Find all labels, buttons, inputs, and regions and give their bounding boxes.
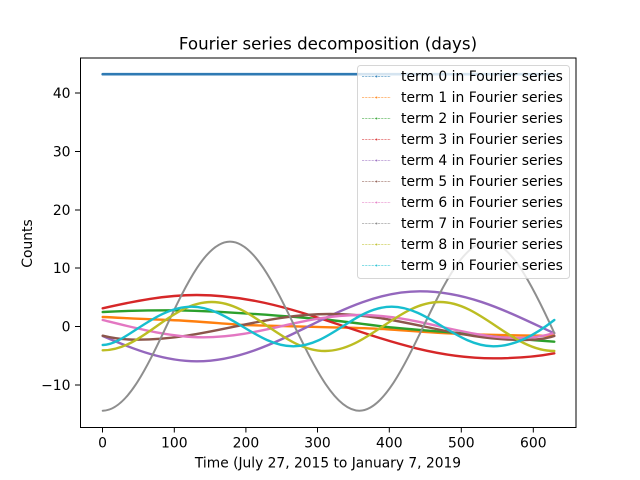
legend labels: term 4 in Fourier series <box>401 153 563 169</box>
y axis ticks and labels: −10 <box>41 378 70 394</box>
x axis ticks and labels: 0 <box>98 436 107 452</box>
x axis ticks and labels: 100 <box>161 436 188 452</box>
legend labels: term 7 in Fourier series <box>401 216 563 232</box>
y axis ticks and labels <box>41 86 80 394</box>
line: term 6 <box>103 315 554 338</box>
y axis ticks and labels: 40 <box>53 86 70 102</box>
legend <box>358 66 570 278</box>
line: term 5 <box>103 314 554 340</box>
y axis ticks and labels: 10 <box>53 261 70 277</box>
line: term 2 <box>103 310 554 342</box>
legend handles <box>362 76 391 266</box>
x axis ticks and labels: 200 <box>233 436 259 452</box>
y axis label: Counts <box>20 219 36 268</box>
legend labels: term 9 in Fourier series <box>401 258 563 274</box>
line: term 9 <box>103 307 554 346</box>
line: term 4 <box>103 291 554 361</box>
legend markers <box>376 76 378 266</box>
y axis ticks and labels: 30 <box>53 144 70 160</box>
legend labels: term 6 in Fourier series <box>401 195 563 211</box>
y axis ticks and labels: 20 <box>53 203 70 219</box>
y axis ticks and labels: 0 <box>62 320 70 336</box>
chart lines: ten Fourier terms <box>103 74 554 411</box>
x axis ticks and labels: 600 <box>520 436 547 452</box>
x axis ticks and labels <box>98 428 547 452</box>
legend labels: term 1 in Fourier series <box>401 90 563 106</box>
legend labels <box>401 69 563 274</box>
x axis ticks and labels: 400 <box>376 436 403 452</box>
legend labels: term 5 in Fourier series <box>401 174 563 190</box>
line: term 1 <box>103 317 554 336</box>
legend labels: term 0 in Fourier series <box>401 69 563 85</box>
legend labels: term 8 in Fourier series <box>401 237 563 253</box>
title: Fourier series decomposition (days) <box>179 34 477 53</box>
line: term 7 <box>103 242 554 411</box>
line: term 0 <box>103 73 554 75</box>
line: term 8 <box>103 302 554 351</box>
legend labels: term 2 in Fourier series <box>401 111 563 127</box>
axes frame <box>80 58 576 428</box>
line: term 3 <box>103 295 554 358</box>
legend labels: term 3 in Fourier series <box>401 132 563 148</box>
x axis ticks and labels: 500 <box>448 436 475 452</box>
x axis label: Time (July 27, 2015 to January 7, 2019 <box>194 455 461 471</box>
x axis ticks and labels: 300 <box>304 436 331 452</box>
